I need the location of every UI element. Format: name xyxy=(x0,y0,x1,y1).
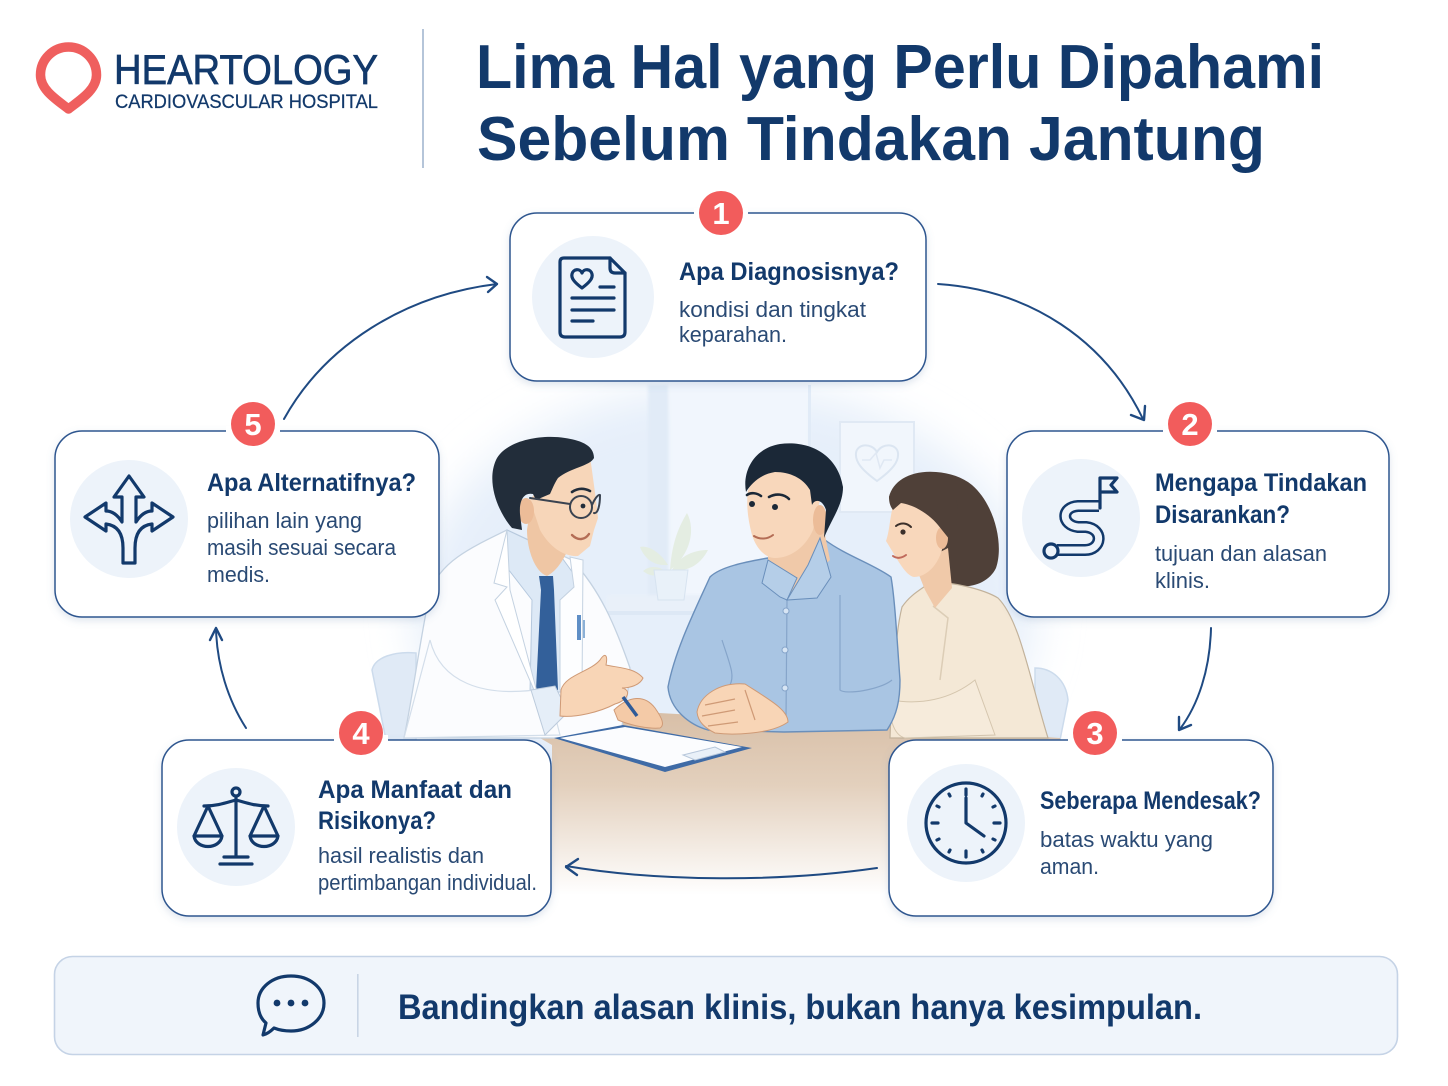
badge 3: 3 xyxy=(1086,716,1104,751)
step 5 text xyxy=(207,469,416,587)
step 5 text: pilihan lain yang xyxy=(207,508,362,533)
wife xyxy=(842,472,1048,738)
chairs xyxy=(372,653,1068,740)
arrows between steps xyxy=(210,277,1211,878)
pen hand xyxy=(614,698,662,728)
icon: clock xyxy=(907,764,1025,882)
step 5 text: medis. xyxy=(207,562,270,587)
pens xyxy=(577,615,581,640)
icon: logo ring xyxy=(40,47,96,109)
step 2 text: tujuan dan alasan xyxy=(1155,541,1327,566)
neck xyxy=(768,520,830,600)
step 3 text xyxy=(1040,787,1261,879)
panel: step 1 diagnosis xyxy=(510,191,926,381)
hair xyxy=(745,443,843,538)
step 2 text xyxy=(1155,469,1367,593)
arrow: 5 to 1 xyxy=(284,277,497,419)
wife's face details xyxy=(893,523,911,558)
illustration: doctor consulting patient and wife xyxy=(372,385,1068,895)
icon: balance scales xyxy=(177,768,295,886)
wall poster with heart xyxy=(840,422,914,512)
panel: step 4 benefits and risks xyxy=(162,711,551,916)
arrow: 1 to 2 xyxy=(938,284,1145,420)
step 4 text: Risikonya? xyxy=(318,807,436,835)
step 5 text: masih sesuai secara xyxy=(207,535,397,560)
icon: speech bubble xyxy=(258,976,324,1035)
step 4 text xyxy=(318,776,537,895)
step 3 text: aman. xyxy=(1040,854,1099,879)
neck and head xyxy=(527,510,572,576)
title xyxy=(476,33,1324,174)
patient man xyxy=(668,443,900,734)
face details xyxy=(747,493,789,539)
coat xyxy=(404,530,630,738)
shirt xyxy=(668,540,900,732)
head xyxy=(747,470,820,558)
neck and face xyxy=(915,548,952,608)
tie xyxy=(536,576,558,690)
step 3 text: Seberapa Mendesak? xyxy=(1040,787,1261,815)
arrow: 4 to 5 xyxy=(210,628,246,728)
badge 4 xyxy=(339,711,383,755)
arrow: 3 to 4 xyxy=(566,859,877,878)
step 2 text: klinis. xyxy=(1155,568,1210,593)
icon: medical document xyxy=(532,236,654,358)
hand on arm xyxy=(842,672,892,717)
panel: step 2 why xyxy=(1007,402,1389,617)
room background xyxy=(415,385,1035,835)
panel: step 5 alternatives xyxy=(55,402,439,617)
front hair xyxy=(889,477,958,540)
badge 5 xyxy=(231,402,275,446)
hair xyxy=(492,437,594,530)
table xyxy=(540,712,1060,895)
panel: step 3 urgency xyxy=(889,711,1273,916)
step 3 text: batas waktu yang xyxy=(1040,827,1213,852)
arrow: 2 to 3 xyxy=(1179,628,1211,730)
badge 2: 2 xyxy=(1181,407,1199,442)
step 4 text: hasil realistis dan xyxy=(318,843,484,868)
sweater xyxy=(890,582,1048,738)
step 2 text: Disarankan? xyxy=(1155,501,1290,529)
gesturing hand xyxy=(560,655,643,716)
clasped hands xyxy=(697,684,788,734)
badge 1 xyxy=(699,191,743,235)
step 1 text: Apa Diagnosisnya? xyxy=(679,258,899,286)
back hair xyxy=(889,472,999,586)
badge 3 xyxy=(1073,711,1117,755)
callout text: Bandingkan alasan klinis, bukan hanya kesimpulan. xyxy=(398,988,1202,1027)
title: Sebelum Tindakan Jantung xyxy=(477,105,1265,174)
icon: branching arrows xyxy=(70,460,188,578)
doctor xyxy=(404,437,662,738)
step 1 text: kondisi dan tingkat xyxy=(679,297,866,322)
coat arm xyxy=(404,640,560,738)
step 1 text xyxy=(679,258,899,347)
logo tagline: CARDIOVASCULAR HOSPITAL xyxy=(115,92,378,113)
logo: Heartology xyxy=(40,46,378,113)
brows, glasses, face xyxy=(530,489,600,539)
badge 2 xyxy=(1168,402,1212,446)
icon: winding path with flag xyxy=(1022,459,1140,577)
clipboard xyxy=(554,725,752,772)
title: Lima Hal yang Perlu Dipahami xyxy=(476,33,1324,102)
step 5 text: Apa Alternatifnya? xyxy=(207,469,416,497)
callout banner xyxy=(54,956,1398,1054)
step 4 text: Apa Manfaat dan xyxy=(318,776,512,804)
badge 1: 1 xyxy=(712,196,730,231)
badge 5: 5 xyxy=(244,407,262,442)
logo name: HEARTOLOGY xyxy=(114,46,378,93)
step 4 text: pertimbangan individual. xyxy=(318,870,537,895)
step 1 text: keparahan. xyxy=(679,322,787,347)
badge 4: 4 xyxy=(352,716,370,751)
plant xyxy=(640,513,708,600)
step 2 text: Mengapa Tindakan xyxy=(1155,469,1367,497)
